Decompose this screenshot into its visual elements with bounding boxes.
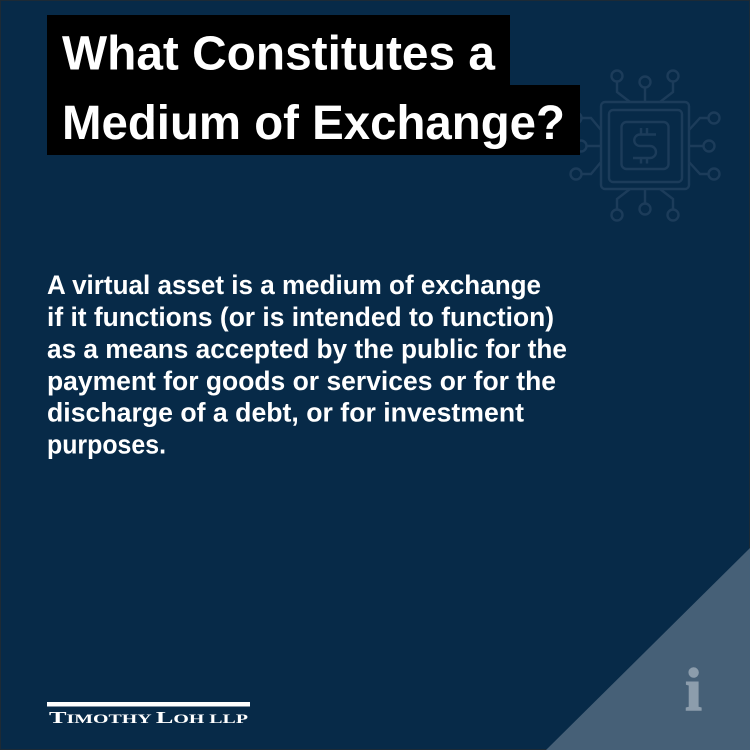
text block: definition: if it functions (or is intended to function) bbox=[47, 302, 554, 332]
title bbox=[47, 15, 580, 155]
logo: Timothy Loh LLP: T IMOTHY L OH LLP bbox=[49, 708, 249, 727]
icon: info: i bbox=[685, 657, 702, 723]
text block: definition: as a means accepted by the public for the bbox=[47, 334, 567, 364]
text block: definition: discharge of a debt, or for investment bbox=[47, 398, 524, 428]
title: What Constitutes a bbox=[62, 26, 496, 80]
logo: Timothy Loh LLP bbox=[47, 702, 250, 727]
text block: definition: payment for goods or services or for the bbox=[47, 366, 556, 396]
icon: chip with dollar sign bbox=[570, 70, 720, 220]
corner triangle with info icon bbox=[546, 548, 750, 750]
text block: definition bbox=[47, 270, 567, 460]
title: Medium of Exchange? bbox=[62, 96, 565, 150]
text block: definition: A virtual asset is a medium of exchange bbox=[47, 270, 541, 300]
text block: definition: purposes. bbox=[47, 430, 166, 460]
